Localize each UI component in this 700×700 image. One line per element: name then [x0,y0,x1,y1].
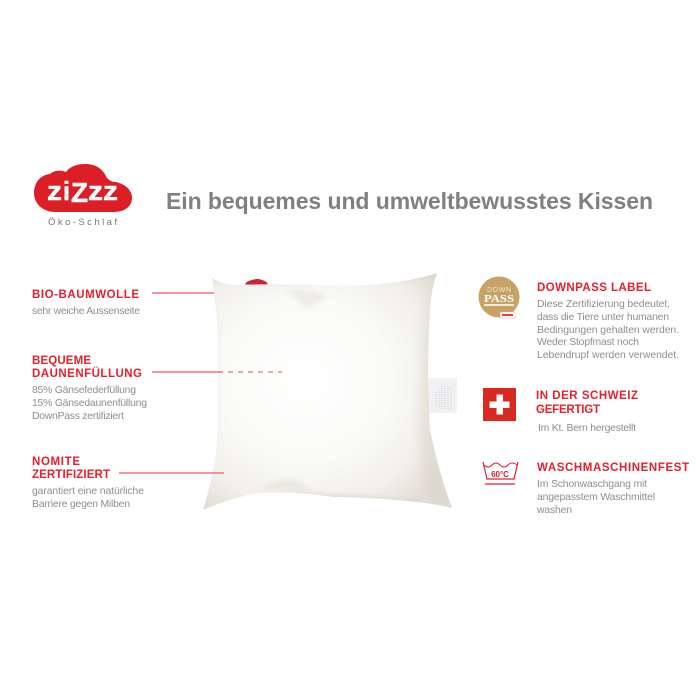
icon: wash at 60 degrees: 60°C [491,470,509,479]
leader line [119,472,224,474]
logo wordmark: z [103,176,118,206]
logo cloud [34,164,132,212]
description: Im Schonwaschgang mit [537,479,647,490]
heading: WASCHMASCHINENFEST [537,462,689,474]
pillow body [203,273,452,510]
pillow logo tag [245,279,268,285]
logo wordmark: i [63,176,70,206]
pillow care label tag [427,378,457,413]
feature: DownPass Label: Bedingungen gehalten werden. [537,325,679,336]
icon: DownPass badge: DOWN [487,287,511,294]
description: 85% Gänsefederfüllung [32,385,136,396]
heading: IN DER SCHWEIZ [536,390,638,402]
icon: DownPass badge: PASS [484,293,514,305]
heading: BEQUEME [32,355,91,367]
heading: NOMITE [32,456,80,468]
callout: bequeme Daunenfüllung [32,355,282,422]
callout: bequeme Daunenfüllung: 15% Gänsedaunenfüllung [32,398,147,409]
feature: In der Schweiz gefertigt: GEFERTIGT [536,404,600,416]
heading: DOWNPASS LABEL [537,282,651,294]
callout: bequeme Daunenfüllung: DownPass zertifiziert [32,411,124,422]
leader line [152,292,214,294]
logo wordmark: z [47,176,62,206]
icon: DownPass badge [478,276,520,318]
callout: Nomite zertifiziert: ZERTIFIZIERT [32,469,110,481]
callout: Nomite zertifiziert [32,456,224,510]
icon: wash at 60 degrees [483,462,518,484]
logo wordmark [47,176,118,208]
description: garantiert eine natürliche [32,486,144,497]
logo wordmark: Z [71,177,88,208]
feature: DownPass Label: Weder Stopfmast noch [537,337,639,348]
leader line [152,371,223,373]
icon: Swiss flag [483,388,516,421]
feature: In der Schweiz gefertigt [536,390,638,434]
feature: DownPass Label [537,282,679,361]
feature: DownPass Label: dass die Tiere unter humanen [537,312,669,323]
description: sehr weiche Aussenseite [32,306,140,317]
feature: DownPass Label: Lebendrupf werden verwendet. [537,350,679,361]
title: Ein bequemes und umweltbewusstes Kissen [166,188,653,214]
callout: Bio-Baumwolle [32,289,214,317]
heading: BIO-BAUMWOLLE [32,289,139,301]
panel: pillow photo [203,273,457,510]
feature: Waschmaschinenfest [536,462,689,516]
feature: Waschmaschinenfest: angepasstem Waschmittel [537,492,655,503]
logo: zizzz Öko-Schlaf [34,164,132,228]
description: Diese Zertifizierung bedeutet, [537,299,670,310]
logo wordmark: z [88,176,103,206]
logo tagline: Öko-Schlaf [48,217,117,228]
callout: Nomite zertifiziert: Barriere gegen Milben [32,499,130,510]
description: Im Kt. Bern hergestellt [538,423,636,434]
callout: bequeme Daunenfüllung: DAUNENFÜLLUNG [32,367,142,380]
feature: Waschmaschinenfest: washen [536,505,572,516]
